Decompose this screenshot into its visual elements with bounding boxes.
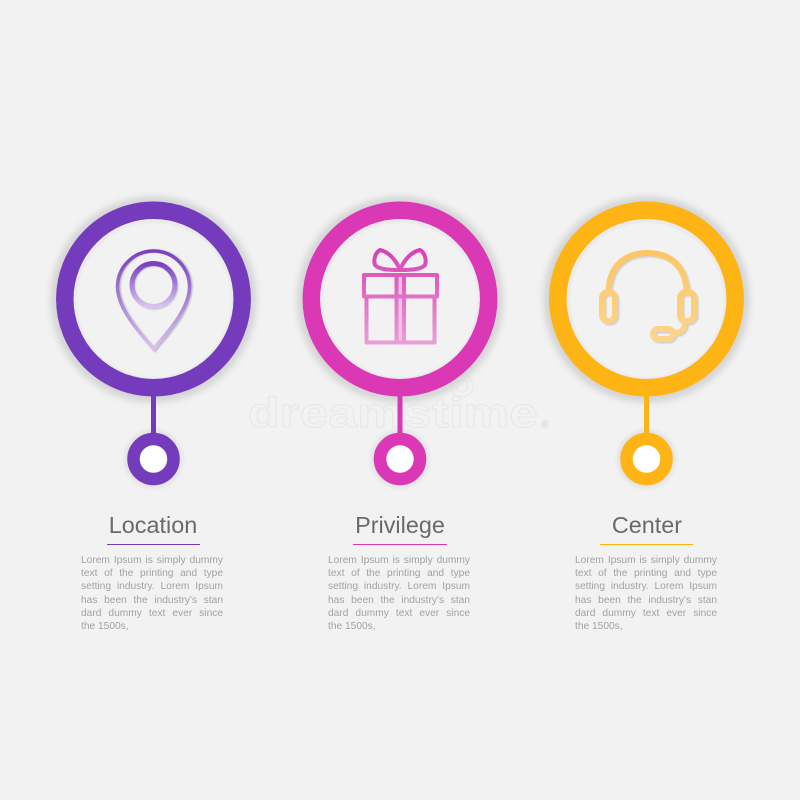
text: privilege description: has been the industry's stan	[328, 595, 470, 606]
text: privilege description: Lorem Ipsum is simply dummy	[328, 554, 470, 566]
underline: location	[107, 544, 200, 545]
watermark: dreamstime	[248, 389, 538, 436]
text: privilege description: dard dummy text ever since	[328, 608, 470, 619]
node: center	[544, 196, 750, 488]
magenta ring	[311, 210, 489, 388]
text: center description: has been the industry's stan	[575, 595, 717, 606]
heading: location: Location	[109, 512, 197, 538]
icon: gift box	[364, 250, 437, 343]
magenta connector	[398, 395, 402, 437]
text: privilege description: text of the printing and type	[328, 568, 470, 579]
watermark	[248, 375, 549, 436]
text: location description: Lorem Ipsum is simply dummy	[81, 554, 223, 566]
ear cups	[602, 292, 615, 321]
text: privilege description: the 1500s,	[328, 621, 376, 632]
text: center description	[575, 554, 717, 632]
text: location description: the 1500s,	[81, 621, 129, 632]
column: location	[81, 512, 223, 632]
amber small dot	[626, 439, 666, 479]
node: location	[50, 196, 256, 488]
amber connector	[644, 395, 649, 437]
node: privilege	[297, 196, 503, 488]
text: location description: setting industry. Lorem Ipsum	[81, 581, 223, 592]
icon: headset	[602, 253, 696, 340]
column: privilege	[328, 512, 470, 632]
text: location description: text of the printing and type	[81, 568, 223, 579]
text: center description: Lorem Ipsum is simply dummy	[575, 554, 717, 566]
icon: map pin	[118, 251, 191, 350]
purple ring	[65, 210, 242, 388]
text: location description	[81, 554, 223, 632]
text: location description: has been the industry's stan	[81, 595, 223, 606]
purple small dot	[134, 439, 174, 479]
column: center	[575, 512, 717, 632]
magenta small dot	[380, 439, 420, 479]
underline: center	[600, 544, 693, 545]
microphone	[672, 323, 685, 333]
text: center description: the 1500s,	[575, 621, 623, 632]
headband	[608, 253, 686, 290]
text: center description: text of the printing and type	[575, 568, 717, 579]
text: location description: dard dummy text ever since	[81, 608, 223, 619]
text: center description: setting industry. Lorem Ipsum	[575, 581, 717, 592]
text: privilege description	[328, 554, 470, 632]
text: center description: dard dummy text ever since	[575, 608, 717, 619]
text: privilege description: setting industry. Lorem Ipsum	[328, 581, 470, 592]
underline: privilege	[353, 544, 447, 545]
heading: privilege: Privilege	[355, 512, 445, 538]
purple connector	[151, 395, 156, 437]
amber ring	[558, 210, 735, 388]
heading: center: Center	[612, 512, 682, 538]
